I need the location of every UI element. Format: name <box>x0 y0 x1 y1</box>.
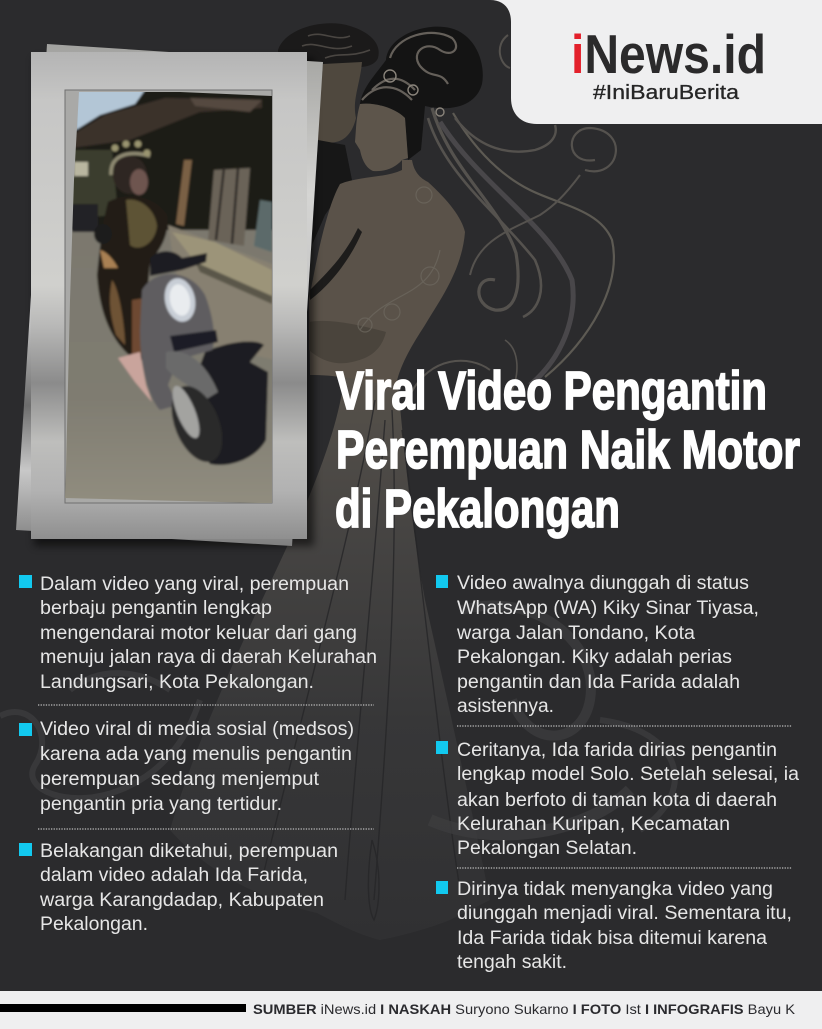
bullet: left 1 <box>19 574 377 693</box>
swirl: lower gown left <box>0 673 200 798</box>
bullet: left 3: Belakangan diketahui, perempuan <box>40 841 338 862</box>
bullet: right 1: Video awalnya diunggah di status <box>457 573 749 594</box>
bullet: left 2: perempuan sedang menjemput <box>40 769 320 790</box>
veil strands <box>410 35 616 395</box>
tagline: #IniBaruBerita <box>593 82 740 104</box>
bullet: right 2: lengkap model Solo. Setelah selesai, ia <box>457 764 799 785</box>
illustration: bride and groom <box>0 23 675 940</box>
bullet: right 3: Dirinya tidak menyangka video yang <box>457 879 773 900</box>
bullet: left 3: Pekalongan. <box>40 914 148 935</box>
logo panel <box>490 0 822 124</box>
groom arm fold <box>310 228 362 300</box>
bullet: left 1: mengendarai motor keluar dari gang <box>40 623 357 644</box>
scooter shadow <box>200 340 269 466</box>
footer bar <box>0 1004 246 1012</box>
photo: bride riding scooter <box>60 90 275 510</box>
photo frame stack <box>16 44 323 546</box>
bullet: right 2: akan berfoto di taman kota di daerah <box>457 790 777 811</box>
swirl: lower gown right <box>430 606 675 834</box>
bullet: right 2: Ceritanya, Ida farida dirias pengantin <box>457 740 777 761</box>
bullet: right 3: tengah sakit. <box>457 952 567 973</box>
bullet: right 2 <box>436 740 799 859</box>
bride back <box>309 160 465 385</box>
bullet: left 1: Landungsari, Kota Pekalongan. <box>40 672 314 693</box>
bullet: right 2: Kelurahan Kuripan, Kecamatan <box>457 814 730 835</box>
bullet: left 1: menuju jalan raya di daerah Kelurahan <box>40 647 377 668</box>
bullet: left 3: warga Karangdadap, Kabupaten <box>39 890 324 911</box>
scooter handlebar <box>150 251 207 276</box>
frame shadow <box>34 58 314 546</box>
bullet: left 2: karena ada yang menulis pengantin <box>40 744 352 765</box>
crown <box>112 140 150 156</box>
bullet: right 3 <box>436 879 792 973</box>
road <box>60 225 275 510</box>
credits: SUMBER iNews.id I NASKAH Suryono Sukarno I FOTO Ist I INFOGRAFIS Bayu K <box>253 1001 796 1017</box>
bride head <box>113 156 147 194</box>
gown folds <box>262 400 460 920</box>
roof <box>72 98 262 148</box>
fender <box>166 351 218 400</box>
bullet: right 2: Pekalongan Selatan. <box>457 838 637 859</box>
sky <box>76 90 145 130</box>
title <box>335 361 800 539</box>
bullet: left 3: dalam video adalah Ida Farida, <box>40 865 308 886</box>
bullet: left 1: berbaju pengantin lengkap <box>40 598 272 619</box>
headlight <box>163 276 197 324</box>
bullet: left 3 <box>19 841 338 935</box>
back ornament <box>358 187 440 332</box>
bullet: right 3: diunggah menjadi viral. Sementara itu, <box>457 903 792 924</box>
gown <box>170 368 490 940</box>
bride face <box>355 104 408 171</box>
back frame <box>16 44 323 546</box>
bride arm <box>100 250 118 268</box>
footer <box>0 991 822 1029</box>
bullet: right 3: Ida Farida tidak bisa ditemui karena <box>457 928 767 949</box>
wall planks <box>208 168 250 246</box>
bullet: right 1: asistennya. <box>457 696 554 717</box>
tyre <box>170 385 222 463</box>
upper scene <box>60 90 275 230</box>
bullet: right 1: WhatsApp (WA) Kiky Sinar Tiyasa, <box>457 598 759 619</box>
logo: iNews.id: iNews.id <box>571 23 766 85</box>
groom face <box>316 62 362 143</box>
license plate <box>170 330 218 352</box>
photo recess <box>65 90 272 503</box>
bullet: right 1 <box>436 573 759 717</box>
title: di Pekalongan <box>335 479 620 539</box>
left garden <box>72 150 118 218</box>
bullet: right 1: warga Jalan Tondano, Kota <box>456 623 695 644</box>
kerb <box>172 232 272 296</box>
front frame <box>31 52 307 539</box>
bride hair bun <box>360 27 483 160</box>
bullet: right 1: pengantin dan Ida Farida adalah <box>457 672 740 693</box>
scooter front body <box>140 274 214 410</box>
bullet: right 1: Pekalongan. Kiky adalah perias <box>457 647 732 668</box>
bullet: left 2 <box>19 719 354 815</box>
groom hand <box>309 321 386 363</box>
bullet: left 1: Dalam video yang viral, perempuan <box>40 574 349 595</box>
groom suit <box>312 140 352 245</box>
groom hair <box>278 23 379 67</box>
bride body <box>97 196 168 360</box>
bullet: left 2: Video viral di media sosial (medsos) <box>40 719 354 740</box>
bullet: left 2: pengantin pria yang tertidur. <box>40 794 282 815</box>
